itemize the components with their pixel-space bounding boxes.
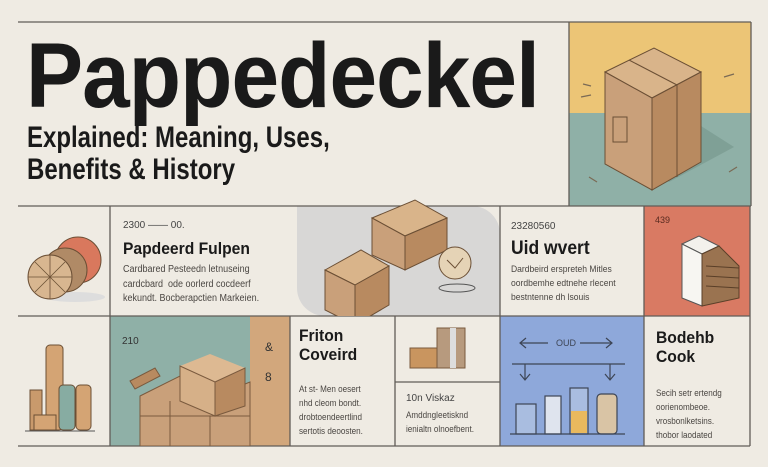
panel: Friton Coveird [299, 326, 363, 436]
icon: book boards [410, 328, 466, 368]
illustration: stacked boxes [122, 336, 273, 446]
subtitle: Explained: Meaning, Uses, [27, 121, 330, 154]
panel: 10n Viskaz [406, 393, 474, 434]
heading [656, 328, 714, 366]
text [656, 388, 722, 440]
text: bestntenne dh lsouis [511, 292, 589, 303]
heading: Friton [299, 326, 343, 345]
text [299, 384, 363, 436]
icon: stacked boards [655, 215, 740, 307]
icon: stacked boards: 439 [655, 215, 670, 225]
diagram: arrows and containers [510, 338, 625, 435]
text: Cardbared Pesteedn letnuseing [123, 264, 250, 275]
subtitle [27, 121, 330, 186]
text: Amddngleetisknd [406, 410, 468, 420]
heading: Coveird [299, 345, 357, 364]
text: cardcbard ode oorlerd cocdeerf [123, 278, 251, 290]
panel: Papdeerd Fulpen [123, 220, 259, 304]
heading: Papdeerd Fulpen [123, 239, 250, 258]
text: Secih setr ertendg [656, 388, 722, 398]
text: At st- Men oesert [299, 384, 361, 394]
heading: Bodehb [656, 328, 714, 347]
text: ienialtn olnoefbent. [406, 424, 474, 434]
text: nhd cleom bondt. [299, 398, 361, 408]
illustration: stacked boxes: 8 [265, 370, 272, 384]
text: drobtoendeertlind [299, 412, 362, 422]
text: sertotis deoosten. [299, 426, 363, 436]
icon: cardboard reels [28, 236, 105, 302]
heading: 10n Viskaz [406, 393, 455, 404]
hero illustration: cardboard box [580, 48, 738, 191]
heading [299, 326, 357, 364]
text: kekundt. Bocberapctien Markeien. [123, 293, 259, 304]
illustration: stacked boxes: 210 [122, 336, 139, 347]
illustration: open boxes and clock [324, 200, 476, 316]
panel: Bodehb Cook [656, 328, 722, 440]
text: oorienombeoe. [656, 402, 710, 412]
text: oordbemhe edtnehe rlecent [511, 278, 616, 289]
text: Dardbeird erspreteh Mitles [511, 264, 612, 275]
text [511, 264, 616, 303]
icon: bottles [25, 344, 95, 432]
number: 23280560 [511, 221, 556, 232]
heading: Uid wvert [511, 238, 590, 259]
text [406, 410, 474, 434]
title: Pappedeckel [26, 25, 539, 127]
diagram: arrows and containers: OUD [556, 338, 576, 348]
text [123, 264, 259, 304]
subtitle: Benefits & History [27, 153, 235, 186]
illustration: stacked boxes: & [265, 340, 273, 354]
text: vrosbonlketsins. [656, 416, 714, 426]
panel: Uid wvert [511, 221, 616, 303]
heading: Cook [656, 347, 695, 366]
text: thobor laodated [656, 430, 712, 440]
number: 2300 —— 00. [123, 220, 185, 231]
